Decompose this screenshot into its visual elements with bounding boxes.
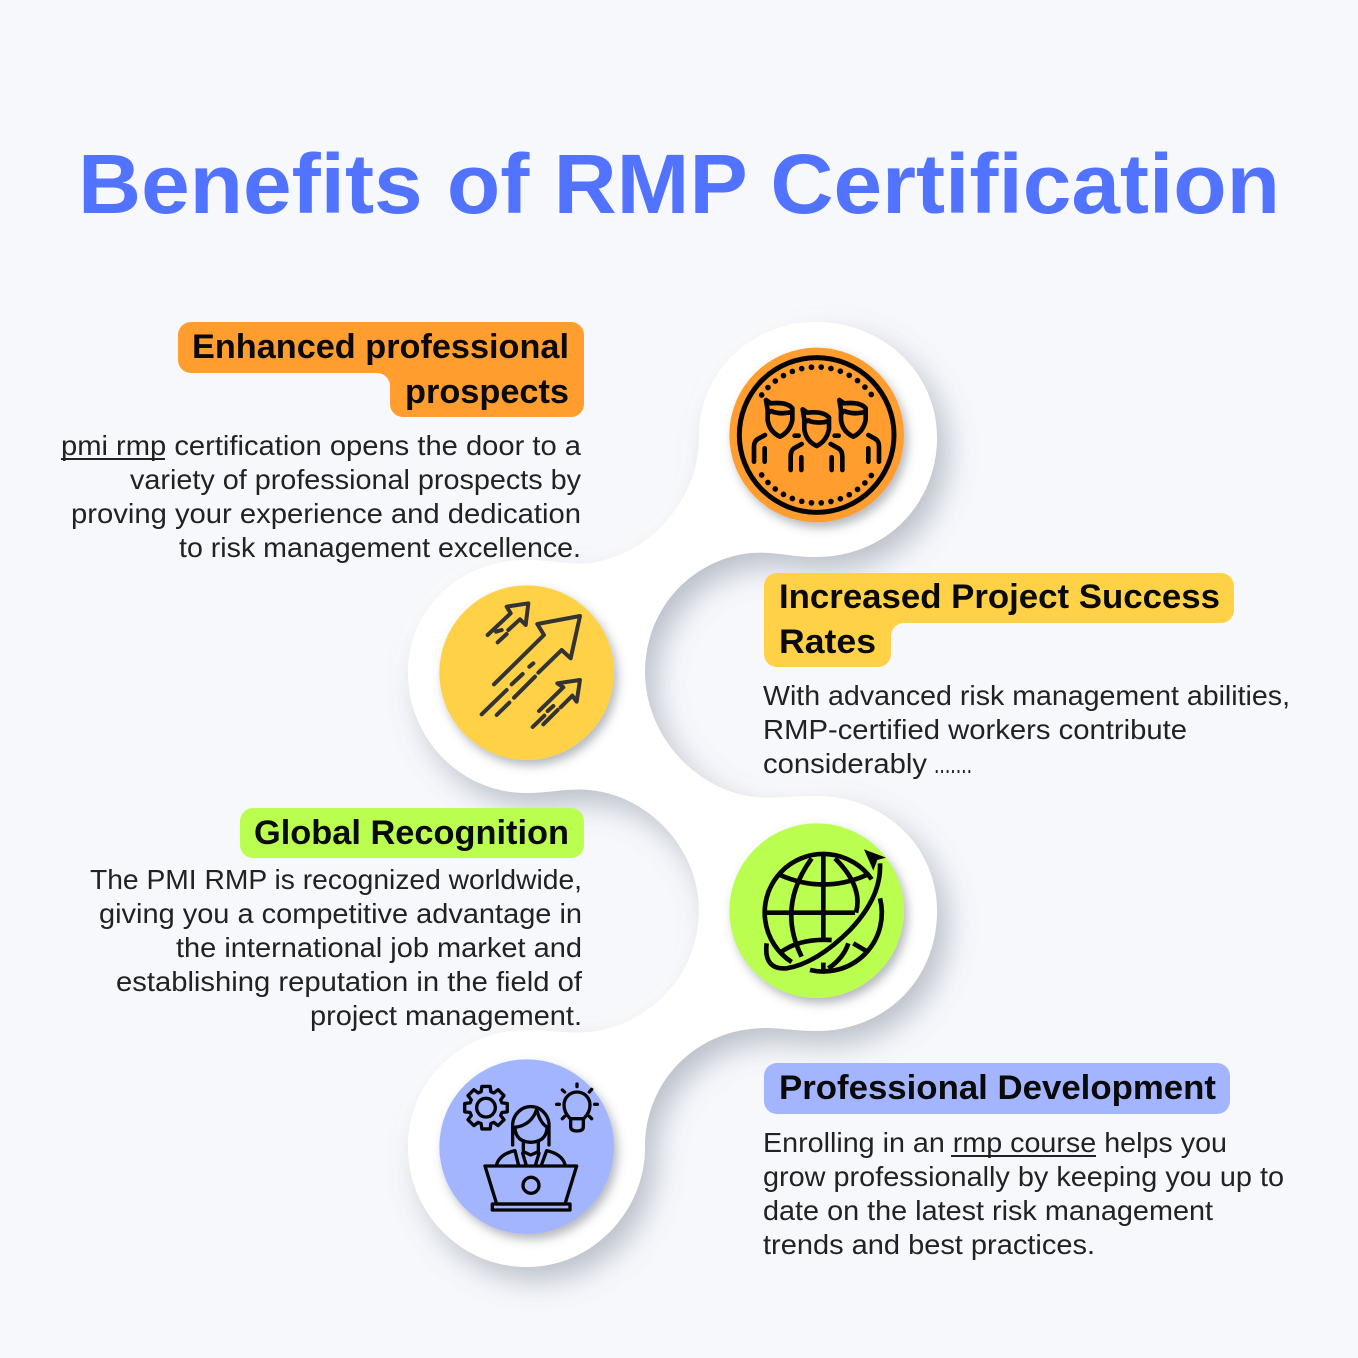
heading pill: global recognition (240, 808, 584, 858)
heading pill: enhanced professional prospects: prospects (405, 373, 569, 411)
body text: enhanced professional prospects: proving your experience and dedication (71, 498, 581, 529)
panel: professional development (763, 1063, 1284, 1260)
heading pill: global recognition: Global Recognition (254, 814, 569, 852)
body text: professional development: trends and best practices. (763, 1229, 1095, 1260)
body text: increased project success rates (763, 680, 1290, 779)
icon: globe with orbit arrow on green circle (729, 823, 904, 998)
body text: increased project success rates: ....... (934, 748, 972, 779)
panel: increased project success rates (763, 573, 1290, 779)
body text: global recognition: the international job market and (176, 932, 582, 963)
white connecting ribbon (408, 322, 937, 1267)
panel: global recognition (90, 808, 584, 1031)
body text: enhanced professional prospects: variety of professional prospects by (130, 464, 581, 495)
body text: global recognition: establishing reputation in the field of (116, 966, 582, 997)
heading pill: increased project success rates: Rates (779, 623, 876, 661)
body text: global recognition: project management. (310, 1000, 582, 1031)
heading pill: enhanced professional prospects (178, 322, 584, 417)
body text: increased project success rates: considerably (763, 748, 927, 779)
heading pill: professional development: Professional Development (779, 1069, 1216, 1107)
title: Benefits of RMP Certification (78, 137, 1280, 231)
heading pill: enhanced professional prospects: Enhanced professional (192, 328, 569, 366)
body text: enhanced professional prospects (61, 430, 581, 563)
heading pill: professional development (764, 1063, 1230, 1114)
body text: professional development: grow professionally by keeping you up to (763, 1161, 1284, 1192)
body text: professional development: date on the latest risk management (763, 1195, 1213, 1226)
body text: global recognition: The PMI RMP is recognized worldwide, (90, 864, 582, 895)
body text: global recognition: giving you a competitive advantage in (99, 898, 582, 929)
icon: rising arrows on yellow circle (439, 585, 614, 760)
body text: increased project success rates: With advanced risk management abilities, (763, 680, 1290, 711)
body text: professional development: Enrolling in an rmp course helps you (763, 1127, 1227, 1158)
body text: global recognition (90, 864, 582, 1031)
body text: increased project success rates: RMP-certified workers contribute (763, 714, 1187, 745)
panel: enhanced professional prospects (61, 322, 584, 563)
heading pill: increased project success rates: Increased Project Success (779, 578, 1220, 616)
heading pill: increased project success rates (764, 573, 1234, 667)
body text: professional development (763, 1127, 1284, 1260)
icon: person at laptop with gear and light bulb on blue circle (439, 1059, 614, 1234)
icon: team of three people on orange circle (729, 348, 904, 522)
body text: enhanced professional prospects: pmi rmp certification opens the door to a (61, 430, 581, 461)
body text: enhanced professional prospects: to risk management excellence. (179, 532, 581, 563)
